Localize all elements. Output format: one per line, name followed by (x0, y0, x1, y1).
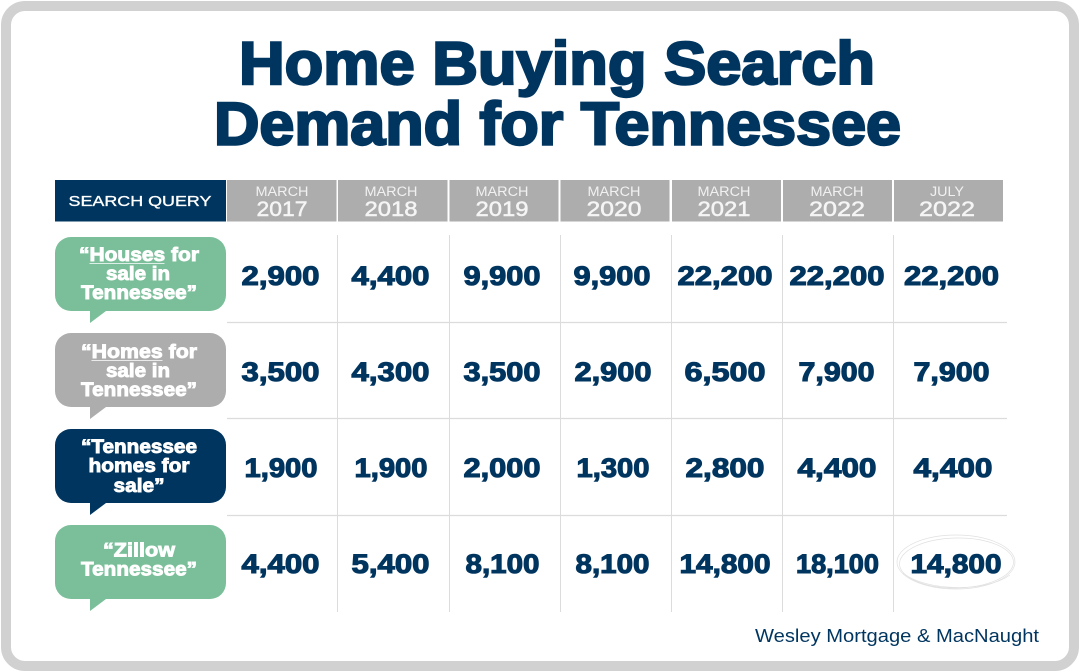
row 1 values: Houses for sale in Tennessee: 22,200 (790, 261, 884, 291)
header: March 2017: 2017 (256, 198, 308, 221)
speech bubble: Houses for sale in Tennessee: sale in (106, 263, 170, 285)
header: March 2019: MARCH (476, 184, 528, 199)
header: search query: SEARCH QUERY (68, 194, 212, 210)
row 2 values: Homes for sale in Tennessee: 2,900 (574, 357, 652, 387)
row 1 values: Houses for sale in Tennessee (242, 261, 999, 291)
table grid lines (227, 235, 1007, 612)
row 4 values: Zillow Tennessee: 14,800 (910, 549, 1002, 579)
row 4 values: Zillow Tennessee: 5,400 (352, 549, 430, 579)
speech bubble: Houses for sale in Tennessee: “Houses for (79, 244, 199, 266)
speech bubble: Tennessee homes for sale: homes for (88, 455, 190, 477)
header: March 2022: MARCH (810, 184, 864, 199)
speech bubble: Tennessee homes for sale (55, 429, 226, 515)
row 2 values: Homes for sale in Tennessee: 7,900 (914, 357, 990, 387)
header: March 2022 (783, 180, 892, 222)
header: March 2021 (672, 180, 781, 222)
speech bubble: Homes for sale in Tennessee: sale in (106, 360, 170, 382)
header: search query (55, 180, 226, 222)
row 3 values: Tennessee homes for sale: 2,000 (464, 453, 540, 483)
hand-drawn circle around 14,800 (897, 535, 1015, 589)
speech bubble: Zillow Tennessee: “Zillow (103, 540, 176, 562)
header: July 2022: JULY (930, 184, 964, 199)
header: March 2020: 2020 (586, 198, 642, 221)
row 2 values: Homes for sale in Tennessee: 3,500 (464, 357, 540, 387)
header: March 2020: MARCH (588, 184, 640, 199)
header: March 2022: 2022 (809, 198, 865, 221)
header: March 2020 (560, 180, 670, 222)
row 2 values: Homes for sale in Tennessee: 3,500 (242, 357, 320, 387)
header: March 2019: 2019 (476, 198, 528, 221)
speech bubble: Homes for sale in Tennessee (55, 333, 226, 419)
row 4 values: Zillow Tennessee: 18,100 (796, 549, 879, 579)
row 3 values: Tennessee homes for sale: 4,400 (914, 453, 992, 483)
row 4 values: Zillow Tennessee: 8,100 (466, 549, 540, 579)
row 4 values: Zillow Tennessee (242, 549, 1002, 579)
header: March 2019 (450, 180, 558, 222)
speech bubble: Houses for sale in Tennessee: Tennessee” (81, 282, 197, 304)
row 2 values: Homes for sale in Tennessee (242, 357, 990, 387)
speech bubble: Zillow Tennessee: Tennessee” (81, 558, 197, 580)
speech bubble: Homes for sale in Tennessee: “Homes for (81, 341, 197, 363)
speech bubble: Zillow Tennessee (55, 525, 226, 611)
row 1 values: Houses for sale in Tennessee: 9,900 (574, 261, 650, 291)
title: Demand for Tennessee (214, 90, 901, 158)
row 2 values: Homes for sale in Tennessee: 7,900 (798, 357, 874, 387)
row 1 values: Houses for sale in Tennessee: 4,400 (352, 261, 430, 291)
row 4 values: Zillow Tennessee: 14,800 (680, 549, 770, 579)
row 3 values: Tennessee homes for sale: 1,300 (576, 453, 650, 483)
row 1 values: Houses for sale in Tennessee: 22,200 (678, 261, 772, 291)
speech bubble: Houses for sale in Tennessee (55, 237, 226, 323)
credit: Wesley Mortgage & MacNaught (755, 625, 1039, 646)
row 4 values: Zillow Tennessee: 8,100 (576, 549, 650, 579)
title (214, 30, 901, 158)
title: Home Buying Search (239, 30, 875, 97)
row 2 values: Homes for sale in Tennessee: 6,500 (684, 357, 766, 387)
header row (55, 180, 1003, 222)
header: March 2018: 2018 (364, 198, 418, 221)
speech bubble: Homes for sale in Tennessee: Tennessee” (81, 379, 197, 401)
header: March 2021: MARCH (698, 184, 750, 199)
row 1 values: Houses for sale in Tennessee: 2,900 (242, 261, 320, 291)
row 1 values: Houses for sale in Tennessee: 22,200 (904, 261, 999, 291)
header: March 2018: MARCH (364, 184, 418, 199)
row 3 values: Tennessee homes for sale: 1,900 (244, 453, 318, 483)
header: July 2022: 2022 (919, 198, 975, 221)
speech bubble: Tennessee homes for sale: sale” (114, 475, 164, 497)
row 4 values: Zillow Tennessee: 4,400 (242, 549, 320, 579)
speech bubble: Tennessee homes for sale: “Tennessee (81, 436, 197, 458)
header: March 2017 (227, 180, 336, 222)
row 3 values: Tennessee homes for sale: 2,800 (686, 453, 764, 483)
row 2 values: Homes for sale in Tennessee: 4,300 (352, 357, 430, 387)
header: July 2022 (894, 180, 1003, 222)
header: March 2021: 2021 (698, 198, 750, 221)
row 3 values: Tennessee homes for sale: 1,900 (354, 453, 428, 483)
row 1 values: Houses for sale in Tennessee: 9,900 (464, 261, 540, 291)
header: March 2018 (338, 180, 448, 222)
row 3 values: Tennessee homes for sale (244, 453, 992, 483)
row 3 values: Tennessee homes for sale: 4,400 (798, 453, 876, 483)
header: March 2017: MARCH (256, 184, 308, 199)
